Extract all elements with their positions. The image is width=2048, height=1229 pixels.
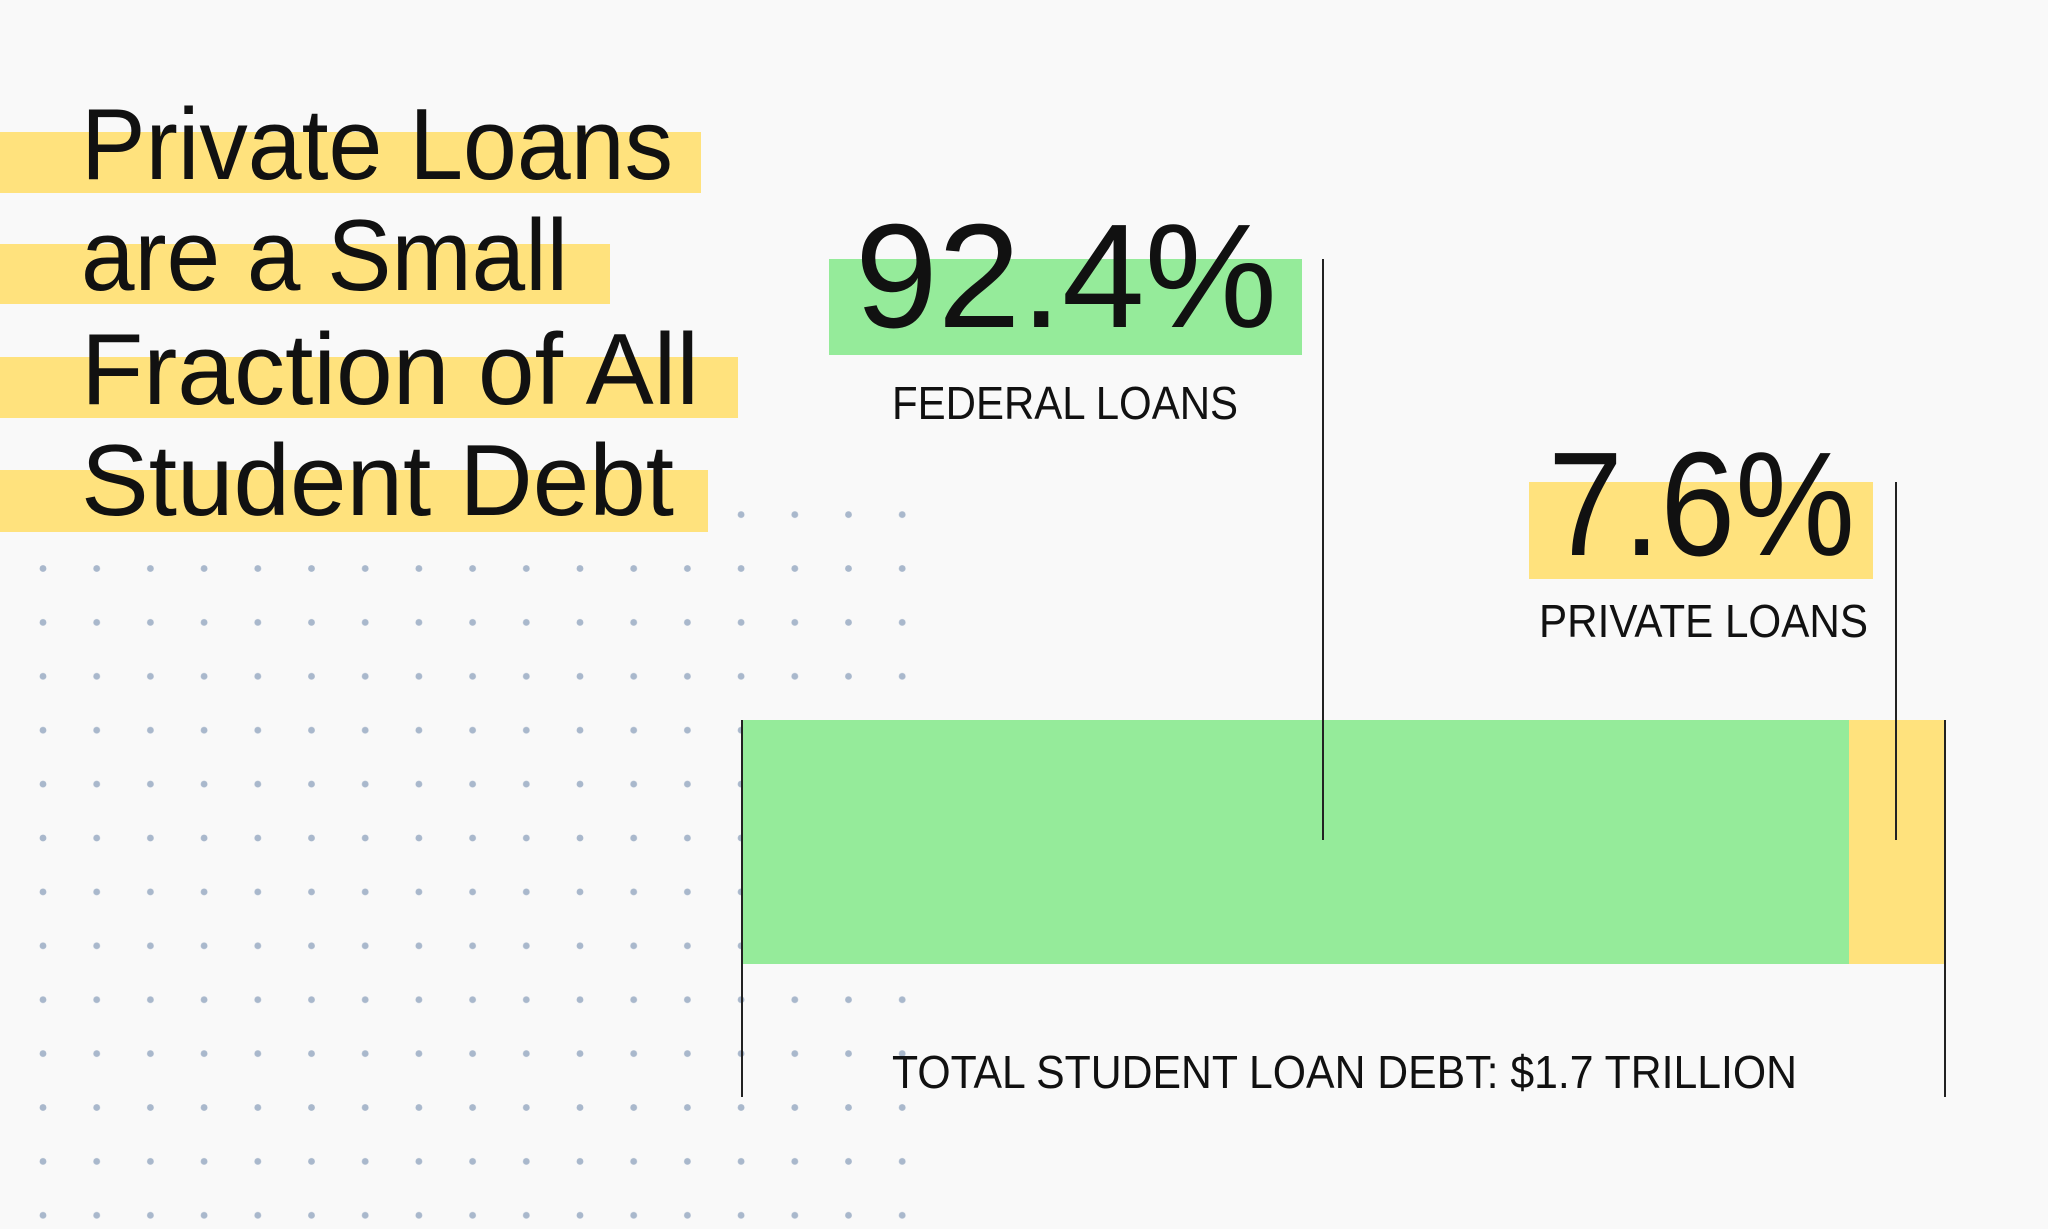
title: Private Loans (81, 89, 673, 201)
bar chart: total debt split (741, 720, 1945, 1097)
title: Student Debt (81, 425, 674, 537)
total label: TOTAL STUDENT LOAN DEBT: $1.7 TRILLION (892, 1046, 1797, 1098)
callout: private loans 7.6% (1529, 422, 1896, 840)
title (0, 89, 738, 537)
callout: private loans 7.6%: 7.6% (1548, 422, 1855, 587)
callout: federal loans 92.4% (829, 194, 1323, 840)
callout: federal loans 92.4%: FEDERAL LOANS (892, 377, 1238, 429)
callout: federal loans 92.4%: 92.4% (855, 194, 1277, 359)
title: are a Small (81, 200, 568, 312)
title: Fraction of All (81, 314, 699, 426)
callout: private loans 7.6%: PRIVATE LOANS (1539, 595, 1868, 647)
